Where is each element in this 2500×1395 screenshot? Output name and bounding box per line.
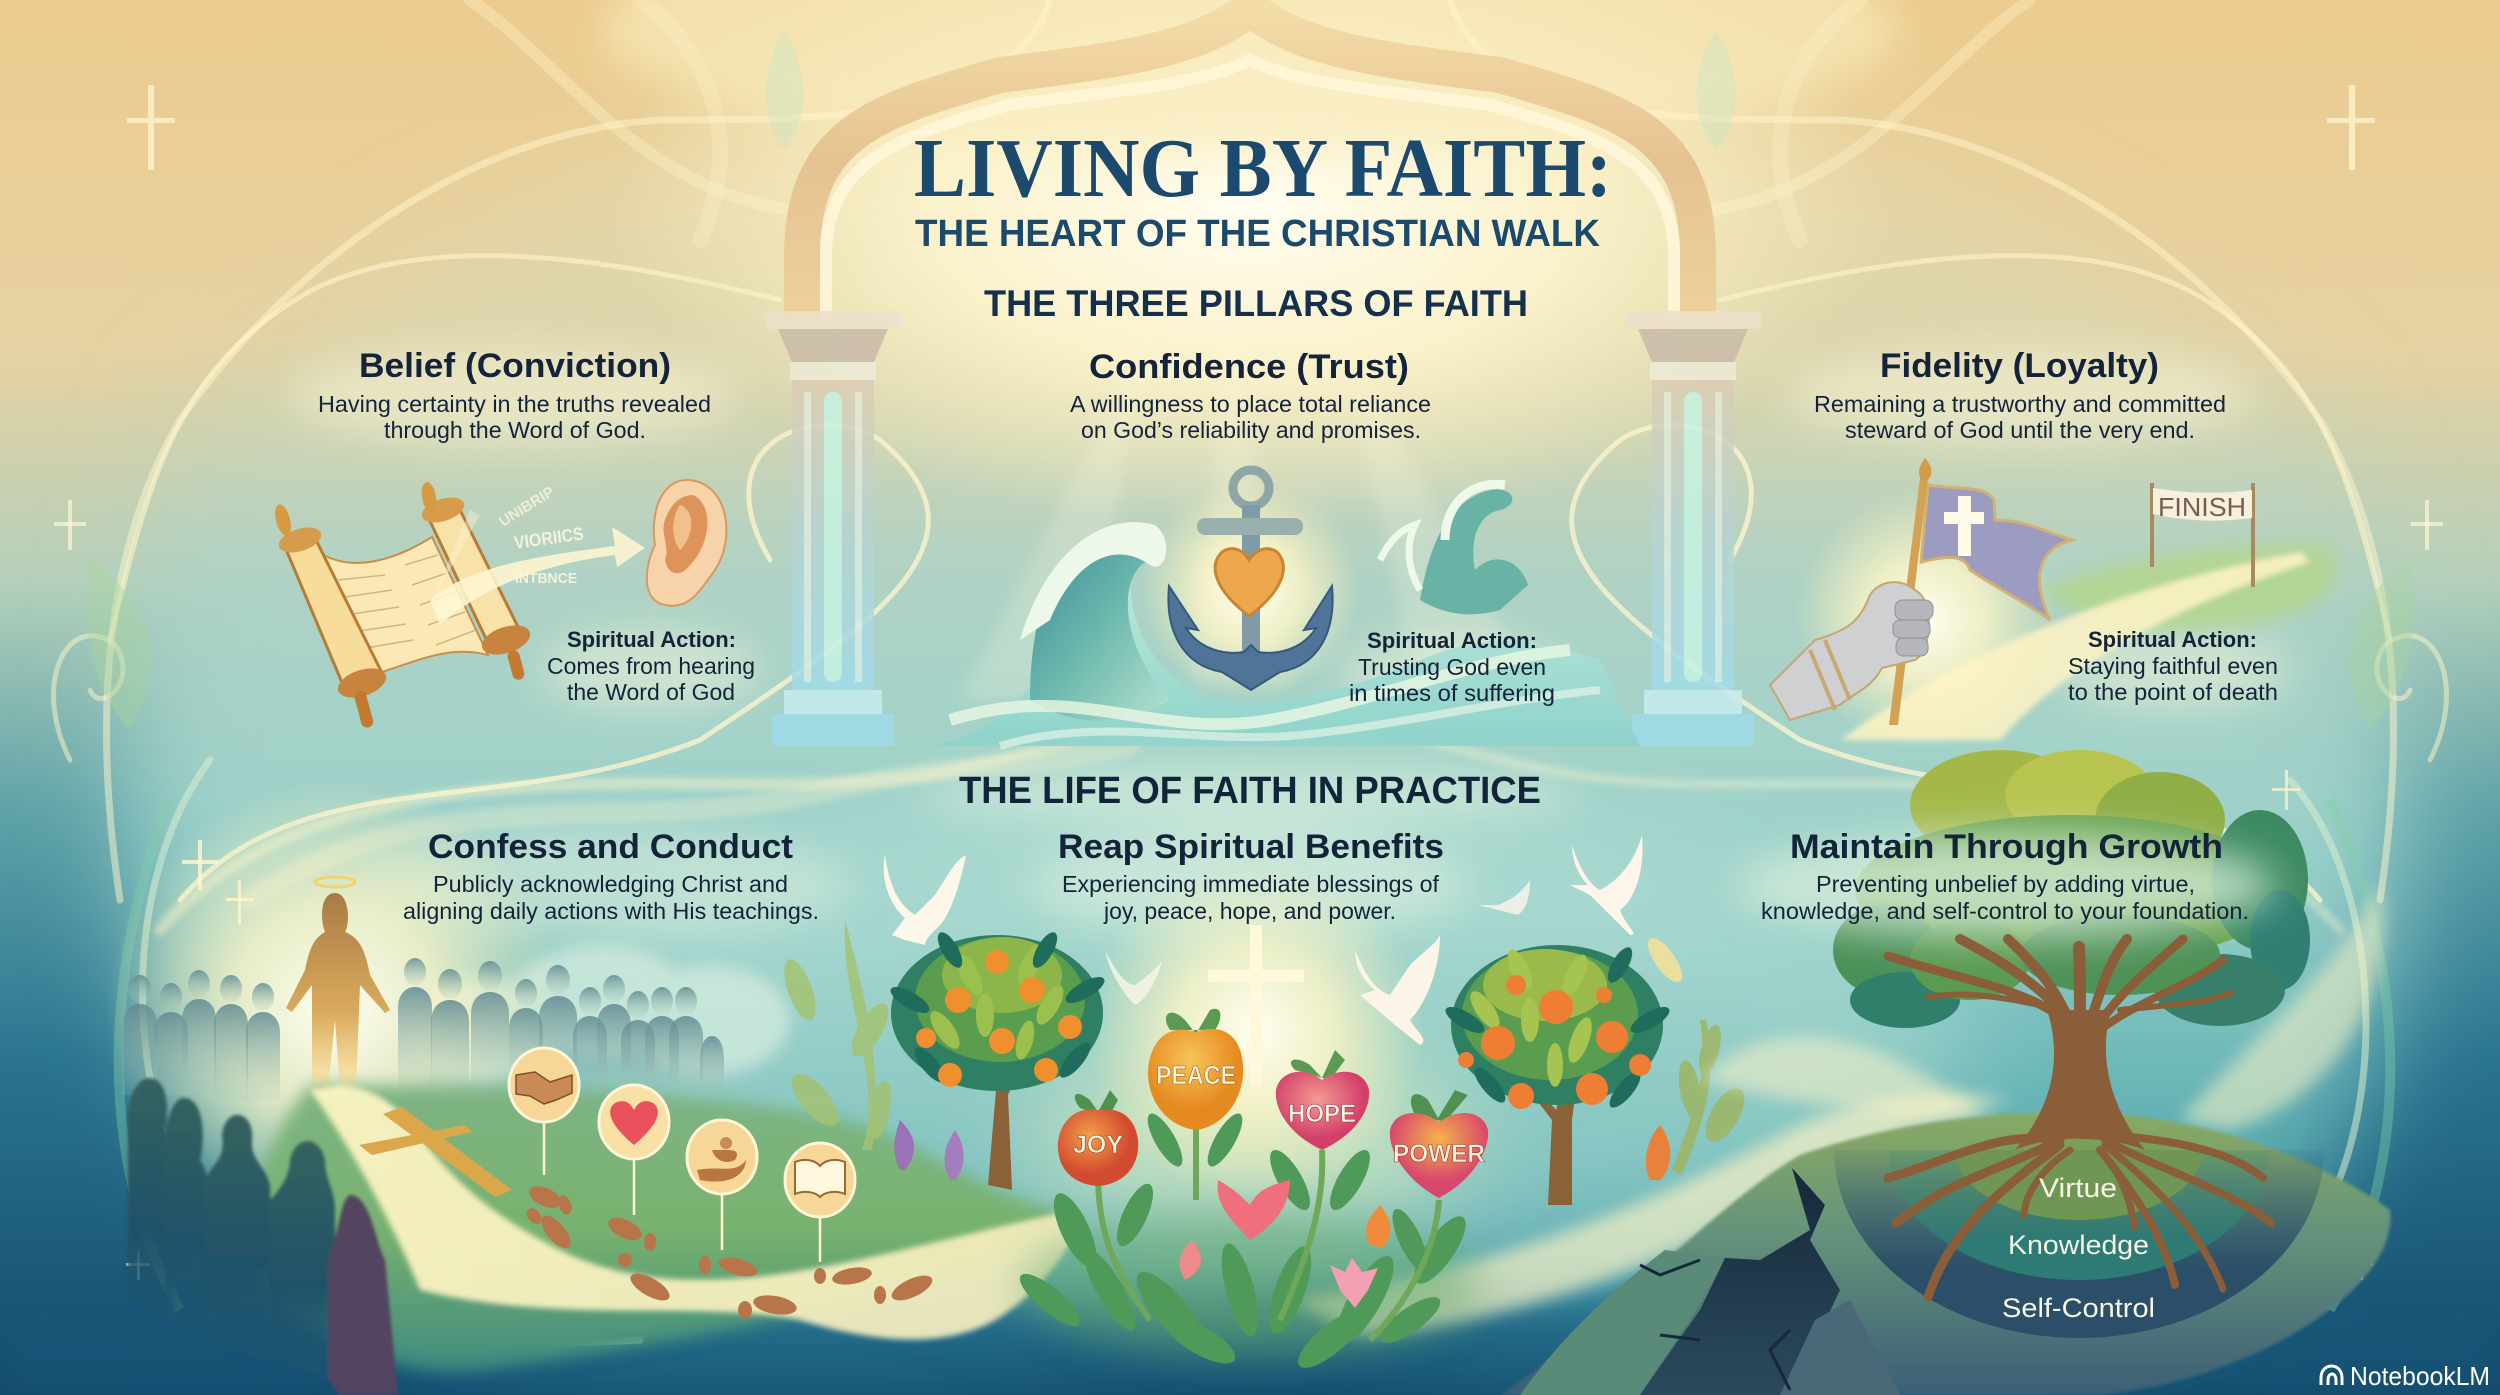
title — [914, 122, 1612, 255]
icon: notebooklm mark — [2321, 1366, 2342, 1385]
illustration: waves — [935, 480, 1640, 746]
heading: maintain: Maintain Through Growth — [1790, 828, 2223, 866]
fruit: peace: PEACE — [1156, 1060, 1236, 1090]
text: fidelity description — [1814, 391, 2226, 443]
panel: belief — [272, 347, 755, 729]
icon: dove left — [884, 855, 966, 945]
icon: dove small left — [1105, 950, 1162, 1005]
icon: dove center — [1355, 935, 1440, 1045]
pillar: left — [765, 311, 901, 746]
icon: handshake badge — [509, 1048, 579, 1175]
fruit: hope — [1276, 1050, 1369, 1150]
icon: corner cross left — [127, 85, 175, 170]
glowing cross — [1085, 860, 1425, 1200]
illustration: foreground people — [127, 1078, 398, 1395]
illustration: crowd — [123, 958, 724, 1100]
title line 1: LIVING BY FAITH: — [914, 122, 1612, 215]
fruit: peace — [1148, 1009, 1243, 1130]
illustration: big tree trunk and roots — [1888, 939, 2271, 1297]
text: maintain description: Preventing unbelief by adding virtue, — [1816, 871, 2195, 897]
heading: fidelity: Fidelity (Loyalty) — [1880, 347, 2159, 385]
heading: reap: Reap Spiritual Benefits — [1058, 828, 1444, 866]
icon: sparkles — [54, 500, 2443, 1280]
illustration: path hill — [1840, 544, 2336, 740]
callout: spiritual action: the Word of God — [567, 679, 735, 705]
icon: anchor — [1168, 470, 1333, 690]
logo: notebooklm: NotebookLM — [2350, 1361, 2490, 1391]
cream swoosh to right — [1290, 1094, 2010, 1335]
fruit: joy — [1058, 1090, 1138, 1186]
panel: confess and conduct — [105, 780, 1078, 1395]
text: reap description — [1062, 871, 1439, 924]
text halos upper — [290, 345, 2290, 715]
panel: fidelity — [1770, 347, 2336, 750]
illustration: cracked ground — [1500, 1112, 2390, 1395]
icon: flag — [1889, 458, 2072, 725]
sign: finish — [2150, 483, 2255, 587]
glow behind figure — [105, 780, 565, 1240]
label: knowledge: Knowledge — [2008, 1230, 2149, 1260]
callout: spiritual action: in times of suffering — [1349, 680, 1555, 706]
text: fidelity description: Remaining a trustworthy and committed — [1814, 391, 2226, 417]
arrow: word to ear: VIORIICS — [513, 523, 585, 553]
illustration: wind swirls — [1700, 880, 2383, 1130]
illustration: glowing path — [310, 1085, 1078, 1339]
text: belief description: through the Word of God. — [384, 417, 646, 443]
icon: book badge — [785, 1143, 855, 1262]
icon: ear — [647, 480, 726, 606]
panel: confidence — [935, 348, 1640, 746]
arch — [802, 8, 1698, 318]
callout: spiritual action: to the point of death — [2068, 679, 2278, 705]
heading: confess and conduct: Confess and Conduct — [428, 828, 793, 866]
plant: stem left — [778, 920, 895, 1150]
icon: dove right — [1570, 835, 1643, 935]
text: confess description: Publicly acknowledging Christ and — [433, 871, 788, 897]
icon: heart badge — [599, 1085, 669, 1215]
icon: footprints — [524, 1182, 936, 1319]
text: reap description: Experiencing immediate blessings of — [1062, 871, 1439, 897]
illustration: central figure — [286, 877, 390, 1090]
fruit: power — [1390, 1090, 1488, 1198]
text: fidelity description: steward of God until the very end. — [1845, 417, 2195, 443]
icon: cross on path — [359, 1107, 512, 1197]
illustration: fruit tree left — [887, 929, 1108, 1190]
arrow: word to ear — [428, 483, 645, 625]
arrow: word to ear: UNIBRIP — [496, 483, 557, 530]
panel: reap spiritual benefits — [778, 828, 2010, 1376]
illustration: big tree crown — [1833, 750, 2310, 1028]
callout: spiritual action — [2068, 627, 2278, 705]
callout: spiritual action — [547, 627, 755, 705]
callout: spiritual action — [1349, 628, 1555, 706]
icon: corner cross right — [2327, 85, 2375, 170]
text: maintain description — [1761, 871, 2249, 924]
illustration: left hill — [240, 1085, 1075, 1372]
icon: caring hand badge — [687, 1120, 757, 1250]
fruit: hope: HOPE — [1288, 1100, 1356, 1128]
heading: three pillars: THE THREE PILLARS OF FAITH — [984, 283, 1528, 324]
text: maintain description: knowledge, and self-control to your foundation. — [1761, 898, 2249, 924]
text: belief description: Having certainty in the truths revealed — [318, 391, 711, 417]
title line 2: THE HEART OF THE CHRISTIAN WALK — [915, 213, 1601, 255]
heading: belief: Belief (Conviction) — [359, 347, 671, 385]
callout: spiritual action: Staying faithful even — [2068, 653, 2278, 679]
text: belief description — [318, 391, 711, 443]
heading: life of faith in practice: THE LIFE OF FAITH IN PRACTICE — [959, 770, 1541, 812]
sign: finish: FINISH — [2158, 492, 2246, 522]
text: confidence description — [1070, 391, 1431, 443]
callout: spiritual action: Trusting God even — [1358, 654, 1546, 680]
callout: spiritual action: Spiritual Action: — [567, 627, 736, 652]
text: confidence description: on God’s reliability and promises. — [1081, 417, 1421, 443]
light rays behind confidence — [960, 330, 1540, 700]
illustration: flower plants — [894, 1109, 1670, 1376]
arrow: word to ear: INTBNCE — [515, 570, 577, 587]
text: confess description — [403, 871, 819, 924]
callout: spiritual action: Spiritual Action: — [1367, 628, 1537, 653]
icon: scroll — [272, 481, 534, 729]
halos lower — [370, 765, 1580, 940]
callout: spiritual action: Spiritual Action: — [2088, 627, 2257, 652]
icon: armored hand — [1770, 582, 1933, 720]
callout: spiritual action: Comes from hearing — [547, 653, 755, 679]
icon: dove small right — [1478, 880, 1530, 915]
text: confess description: aligning daily actions with His teachings. — [403, 898, 819, 924]
pillar: right — [1625, 311, 1761, 746]
text: reap description: joy, peace, hope, and power. — [1103, 898, 1396, 924]
halo behind maintain text — [1735, 833, 2275, 937]
heading: confidence: Confidence (Trust) — [1089, 348, 1409, 386]
text: confidence description: A willingness to place total reliance — [1070, 391, 1431, 417]
label: virtue: Virtue — [2039, 1173, 2117, 1203]
illustration: distant hills clouds — [400, 945, 790, 1080]
fruit: power: POWER — [1393, 1140, 1485, 1168]
plant: stem right — [1642, 933, 1752, 1175]
label: self-control: Self-Control — [2002, 1293, 2155, 1323]
icon: glow — [1795, 490, 2055, 750]
illustration: fruit tree right — [1442, 944, 1673, 1205]
panel: maintain through growth — [1500, 750, 2390, 1395]
fruit: joy: JOY — [1073, 1131, 1123, 1159]
